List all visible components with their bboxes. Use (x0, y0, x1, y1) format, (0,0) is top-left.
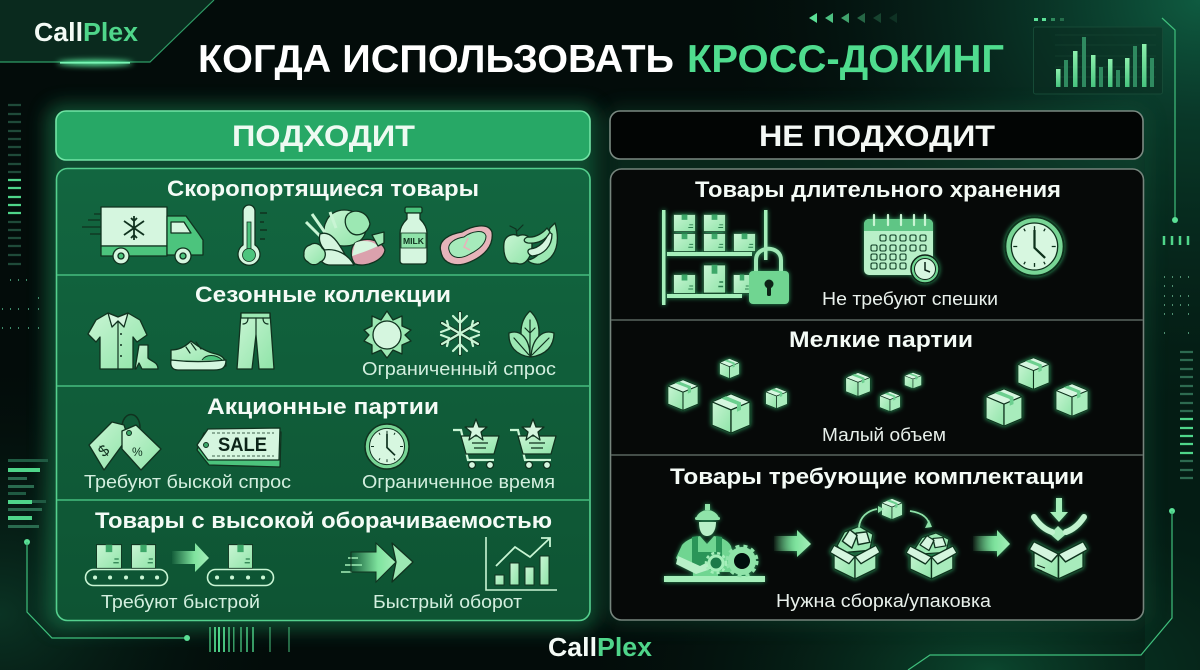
title: КРОСС-ДОКИНГ (687, 38, 1004, 81)
circuit bottom-left (24, 539, 190, 641)
icon: shirt (88, 313, 147, 369)
icon: small box with curved arrows (859, 498, 932, 528)
panel: не подходит (610, 169, 1144, 620)
icons: box cluster middle (846, 372, 922, 412)
bottom logo: CallPlex (548, 634, 652, 662)
icon: conveyor with one box (208, 545, 274, 586)
header: подходит (56, 111, 590, 160)
caption: не требуют спешки: Не требуют спешки (822, 288, 998, 309)
heading: товары с высокой оборачиваемостью: Товары с высокой оборачиваемостью (95, 508, 552, 533)
icon: final box with closing flaps (1029, 498, 1088, 579)
heading: сезонные коллекции: Сезонные коллекции (195, 282, 451, 307)
caption: нужна сборка/упаковка: Нужна сборка/упаковка (776, 590, 992, 611)
icon: milk bottle: MILK (403, 236, 425, 246)
icon: sneaker (171, 341, 226, 370)
arrow: box to sealed box (973, 530, 1010, 557)
circuit bottom-right (908, 508, 1175, 670)
header: не подходит (610, 111, 1143, 159)
arrow: worker to box (774, 530, 811, 557)
heading: скоропортящиеся товары: Скоропортящиеся товары (167, 176, 479, 201)
chevrons top (809, 13, 897, 23)
dots left (2, 280, 39, 328)
icon: warehouse shelf with lock (662, 210, 789, 305)
icon: sale tag: SALE (218, 435, 267, 456)
caption: быстрый оборот: Быстрый оборот (373, 591, 523, 612)
caption: ограниченное время: Ограниченное время (362, 471, 555, 492)
circuit top-right (1162, 18, 1189, 333)
icon: thermometer (238, 205, 267, 265)
ticks right (1180, 352, 1193, 478)
heading: акционные партии: Акционные партии (207, 394, 439, 419)
bars left (8, 459, 48, 528)
arrow: conveyor (172, 543, 209, 572)
logo: CallPlex top: CallPlex (34, 19, 138, 47)
icon: sale tag (197, 428, 281, 467)
icon: worker with gears (664, 504, 765, 582)
icon: conveyor with two boxes (86, 545, 168, 586)
icon: meat (440, 226, 492, 265)
title (198, 38, 1004, 81)
icon: sun (364, 311, 411, 358)
icons: box cluster right (986, 358, 1088, 426)
icon: refrigerated truck (82, 207, 203, 264)
icon: wall clock (1005, 217, 1064, 276)
icon: milk bottle (400, 207, 427, 264)
caption: требуют быской спрос: Требуют быской спрос (84, 471, 291, 492)
icon: vegetables (304, 210, 385, 265)
icon: clock (365, 424, 409, 469)
icon: price tags (89, 414, 161, 470)
heading: товары длительного хранения: Товары длительного хранения (695, 177, 1061, 202)
panel: подходит (56, 168, 590, 620)
caption: ограниченный спрос: Ограниченный спрос (362, 358, 556, 379)
icon: second open box (906, 533, 957, 579)
icon: calendar (864, 215, 939, 283)
caption: малый объем: Малый объем (822, 424, 946, 445)
icon: price tags: $ (95, 442, 113, 461)
heading: товары требующие комплектации: Товары требующие комплектации (670, 464, 1084, 489)
ticks left (8, 105, 21, 264)
icons: box cluster left (668, 358, 787, 433)
heading: мелкие партии: Мелкие партии (789, 327, 973, 352)
icon: snowflake (441, 313, 479, 354)
caption: требуют быстрой: Требуют быстрой (101, 591, 260, 612)
header: не подходит: НЕ ПОДХОДИТ (759, 120, 995, 153)
title: КОГДА ИСПОЛЬЗОВАТЬ (198, 38, 674, 81)
icon: open box with contents (830, 526, 880, 579)
mini bar chart top-right (1034, 18, 1162, 94)
header: подходит: ПОДХОДИТ (232, 120, 415, 153)
icon: shopping cart two (510, 419, 556, 468)
icon: leaves (509, 311, 554, 357)
icon: fast double arrow (341, 543, 413, 582)
icon: boot (135, 345, 158, 369)
icon: shopping cart one (453, 419, 499, 468)
top-left logo plate (0, 0, 214, 66)
barcode decoration (209, 627, 290, 652)
icon: apple and banana (504, 223, 557, 264)
icon: trousers (237, 313, 274, 369)
icon: price tags: % (132, 445, 143, 459)
icon: growth chart (486, 537, 557, 590)
